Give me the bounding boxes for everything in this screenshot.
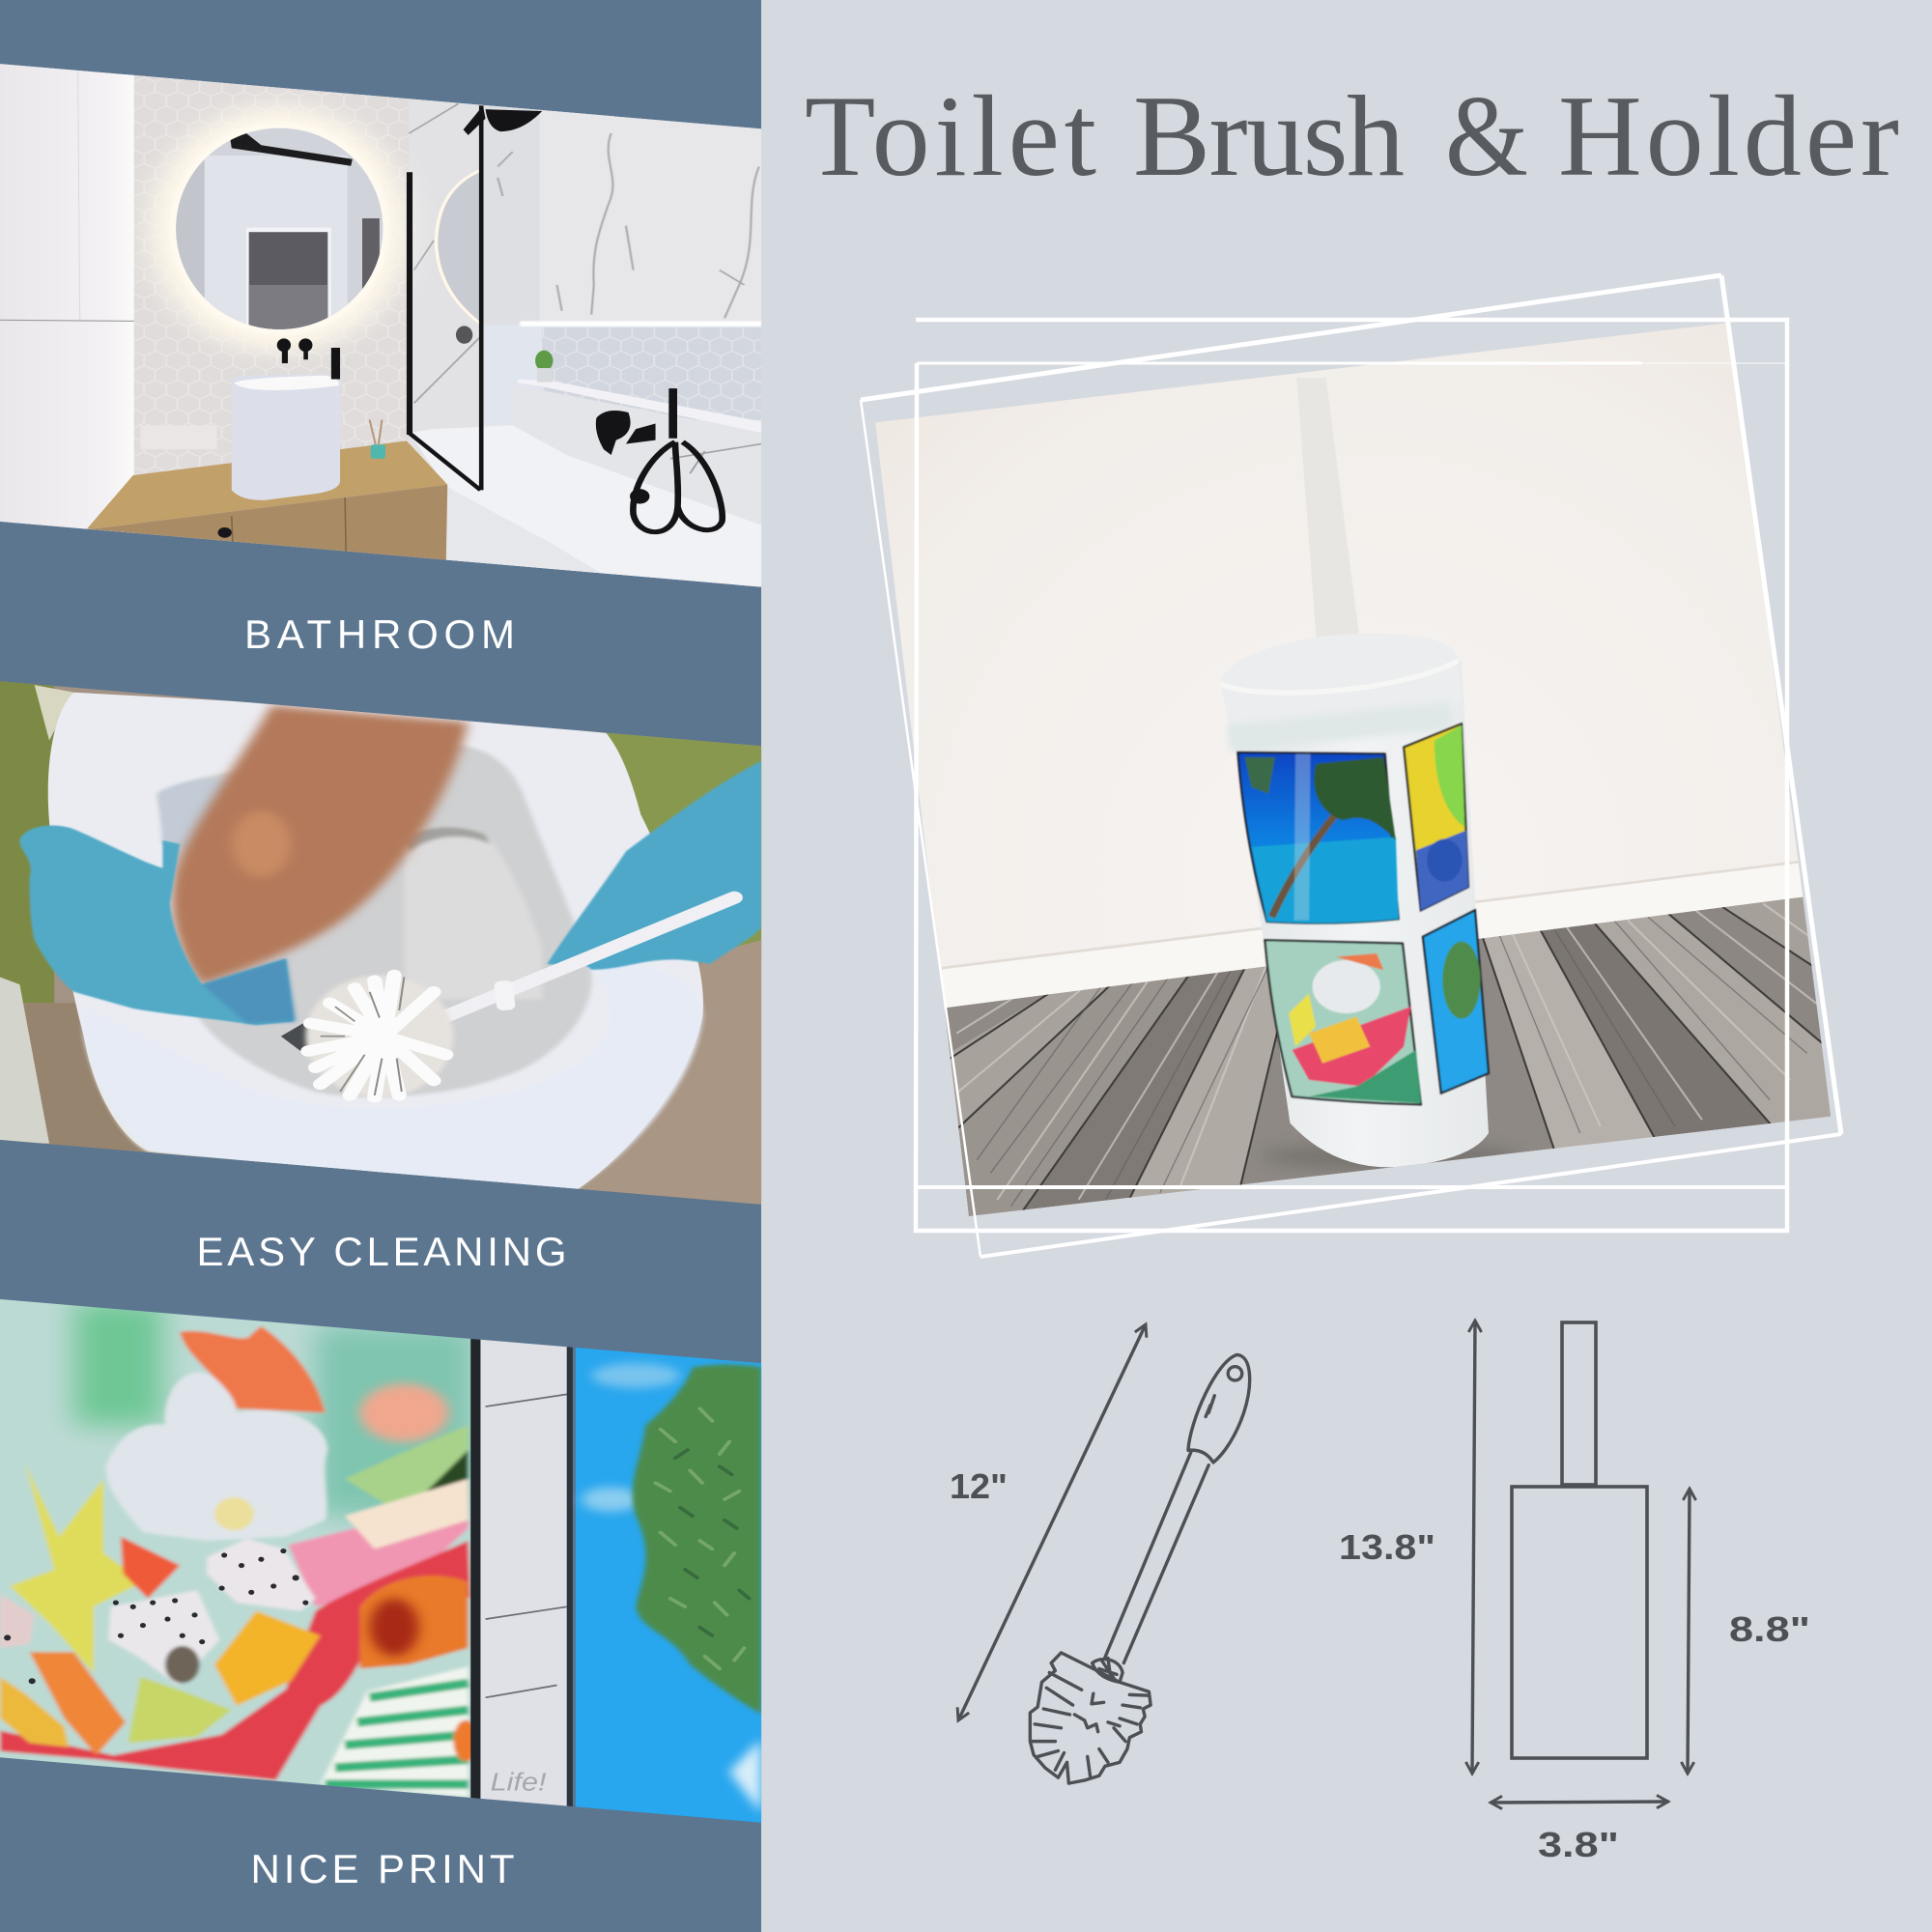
holder lid xyxy=(1221,634,1458,723)
title: & xyxy=(1445,71,1528,200)
photo: bathroom xyxy=(0,48,761,603)
holder outline xyxy=(1512,1322,1647,1758)
print panel: fruit bowl xyxy=(1264,940,1421,1104)
label: 8.8 inches: 8.8" xyxy=(1729,1609,1810,1649)
label: 13.8 inches: 13.8" xyxy=(1339,1527,1435,1567)
title: Holder xyxy=(1558,71,1899,200)
print panel: tree xyxy=(1423,910,1489,1094)
product photo: toilet brush holder on wooden floor xyxy=(875,323,1831,1216)
arrow: brush length 12 inches xyxy=(958,1324,1146,1720)
title xyxy=(805,71,1899,200)
diagram: holder with dimension arrows xyxy=(1339,1321,1810,1864)
icon: toilet brush line drawing xyxy=(1030,1354,1250,1783)
photo: nice print xyxy=(0,1268,763,1846)
label: bathroom: BATHROOM xyxy=(244,611,515,657)
title: Brush xyxy=(1133,71,1405,200)
photo: nice print: Life! xyxy=(491,1768,547,1796)
arrow: total height xyxy=(1472,1321,1475,1774)
frame: white straight rectangles xyxy=(916,320,1787,1231)
brush handle xyxy=(1296,378,1360,651)
print panel: beach xyxy=(1237,753,1399,923)
label: 12 inches: 12" xyxy=(950,1466,1008,1506)
frame: white rotated rectangle xyxy=(861,275,1841,1257)
arrow: holder width xyxy=(1491,1802,1668,1803)
holder body xyxy=(1228,661,1489,1167)
panel: left blue column xyxy=(0,0,761,1932)
label: easy cleaning: EASY CLEANING xyxy=(197,1229,566,1274)
diagram: brush with length arrow xyxy=(950,1324,1250,1783)
label: nice print: NICE PRINT xyxy=(251,1846,514,1891)
arrow: holder height xyxy=(1688,1489,1690,1774)
label: 3.8 inches: 3.8" xyxy=(1538,1825,1619,1864)
photo: easy cleaning xyxy=(0,667,761,1221)
print panel: fruit top right xyxy=(1404,724,1468,910)
title: Toilet xyxy=(805,71,1096,200)
